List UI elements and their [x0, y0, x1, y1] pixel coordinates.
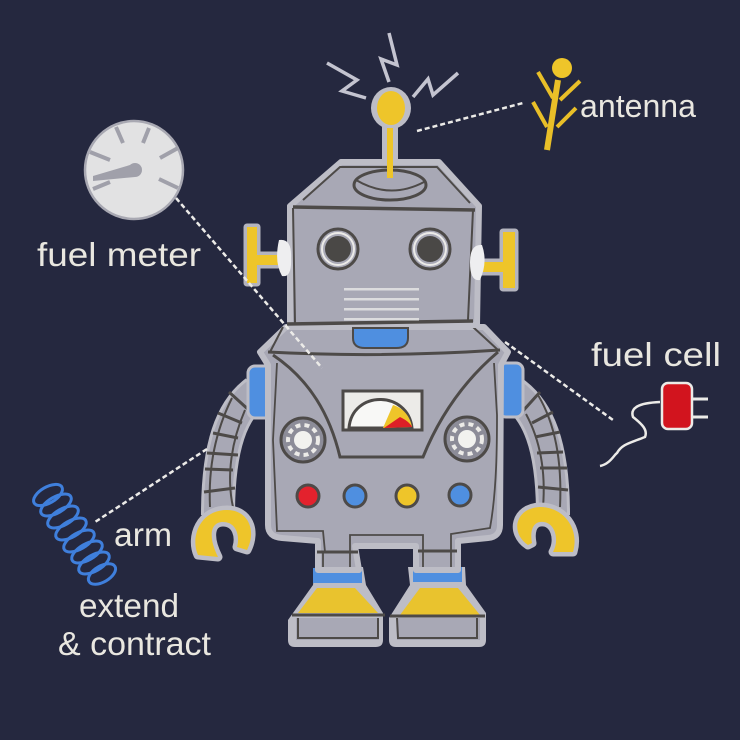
left dial: [281, 418, 325, 462]
neck: [353, 328, 408, 348]
buttons: [297, 484, 471, 507]
body seams: [268, 327, 500, 567]
right dial: [445, 417, 489, 461]
left hand: [195, 510, 251, 557]
label: extend & contract: & contract: [58, 625, 211, 662]
icon: fuel meter: [85, 121, 183, 219]
label: fuel meter: fuel meter: [37, 236, 201, 273]
label: fuel cell: fuel cell: [591, 336, 721, 373]
right hand: [517, 507, 575, 552]
robot: [195, 87, 575, 647]
icon: fuel cell plug: [600, 383, 708, 466]
left ear socket: [277, 240, 291, 276]
left eye: [318, 229, 358, 269]
gauge panel: [343, 391, 422, 430]
antenna base: [354, 128, 426, 200]
left ear bolt: [247, 227, 278, 283]
antenna: [371, 87, 411, 168]
left arm: [204, 366, 272, 515]
dotted leader lines: [95, 103, 613, 522]
label: arm: arm: [114, 516, 172, 553]
left foot: [288, 567, 385, 647]
icon: spring: [30, 480, 119, 588]
label: antenna: antenna: [580, 88, 696, 124]
icon: lightning sparks: [327, 33, 458, 98]
label: extend & contract: extend: [79, 587, 179, 624]
right ear bolt: [482, 232, 515, 288]
mouth grille: [344, 288, 419, 320]
label: extend & contract: [58, 587, 211, 662]
head: [277, 128, 485, 348]
right ear socket: [470, 245, 485, 280]
body: [260, 327, 508, 570]
right foot: [389, 567, 486, 647]
right arm: [499, 363, 568, 515]
right eye: [410, 229, 450, 269]
icon: antenna: [533, 58, 580, 150]
